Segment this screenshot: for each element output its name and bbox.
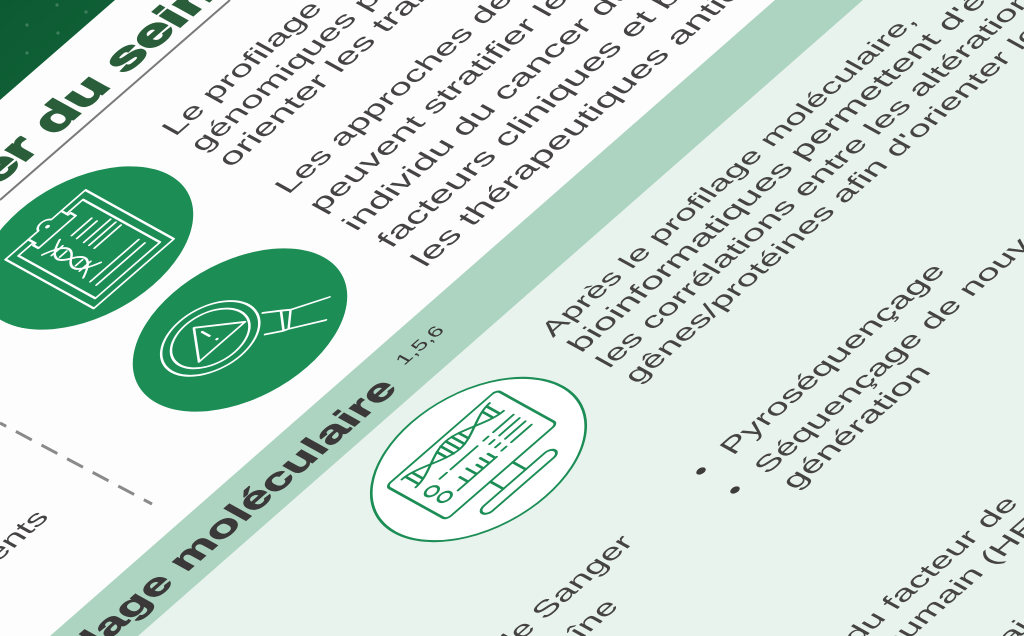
icon: sequencing report [328,350,629,569]
section heading references: 1,5,6 [391,323,449,368]
bullet list: sequencing methods: Pyroséquençage [713,259,951,459]
icon: clipboard with DNA [0,138,237,358]
title underline [0,0,230,200]
bullet list: sequencing methods: génération [774,360,937,493]
text block: molecular profiling description: Après le profilage moléculaire, [533,10,923,341]
header banner: dark green [0,0,115,100]
section band: molecular profiling [50,0,863,636]
dashed divider [0,423,152,504]
icon: magnifier with warning triangle [89,220,391,440]
